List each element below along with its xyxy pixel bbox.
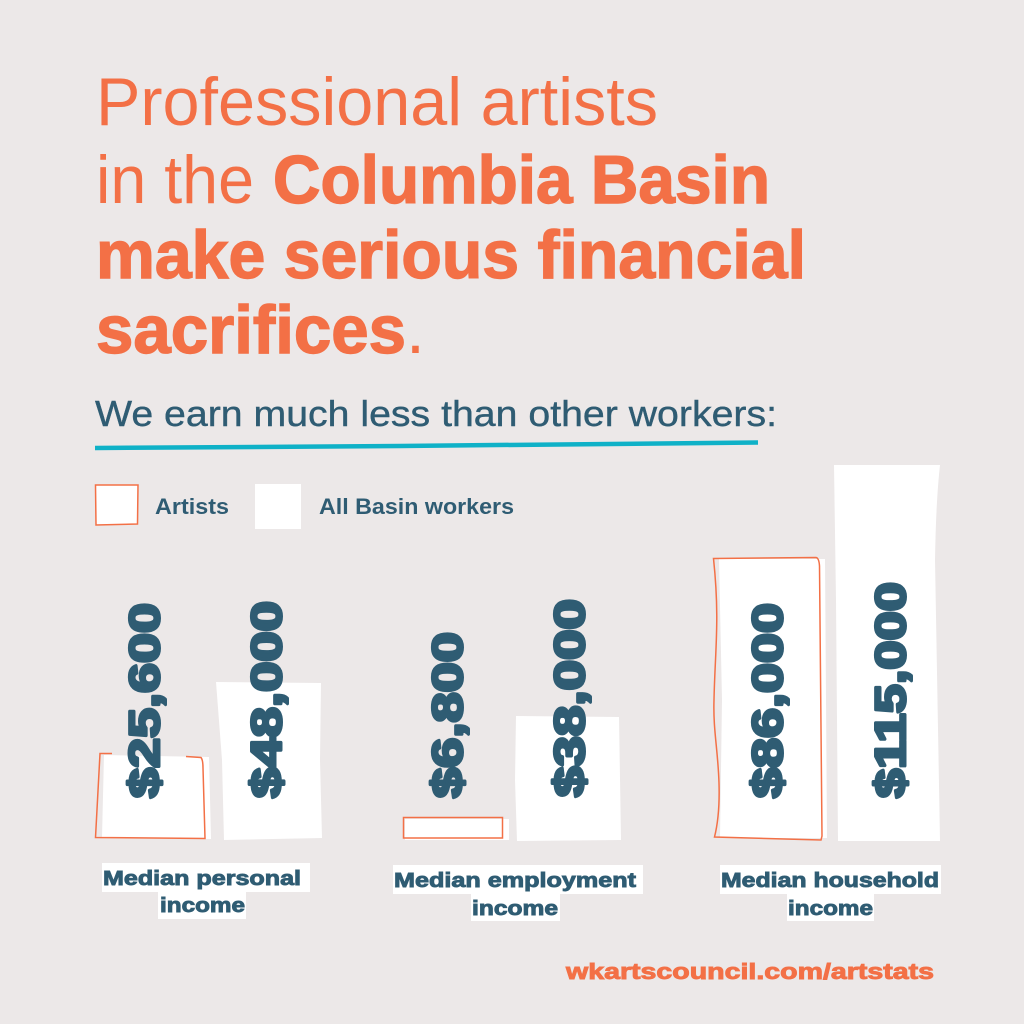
subheading: We earn much less than other workers:	[95, 393, 777, 434]
title: make serious financial	[96, 217, 806, 293]
chart: median personal income	[96, 601, 322, 919]
category label: household	[720, 865, 941, 921]
category label: employment	[393, 865, 643, 921]
category label: household: Median household	[721, 869, 939, 892]
source url: wkartscouncil.com/artstats	[565, 959, 934, 984]
value: artists household income: $86,000	[744, 603, 792, 798]
legend: all workers label: All Basin workers	[319, 494, 514, 519]
subheading underline	[95, 442, 758, 448]
legend: all workers swatch	[255, 484, 301, 529]
category label: personal	[102, 863, 310, 919]
bar: all workers personal income	[216, 682, 322, 840]
category label: employment: income	[472, 897, 558, 920]
category label: household: income	[788, 897, 873, 920]
bar: all workers household income	[834, 465, 940, 841]
bar: artists personal income	[96, 754, 211, 839]
chart: median employment income	[393, 599, 643, 921]
title: Columbia Basin	[273, 142, 770, 218]
bar: all workers employment income	[515, 716, 621, 841]
bar: artists employment income	[404, 818, 509, 840]
bar: artists household income	[714, 558, 827, 840]
value: all workers personal income: $48,000	[243, 601, 291, 798]
value: artists employment income: $6,800	[424, 632, 472, 798]
title: sacrifices	[96, 292, 406, 368]
category label: personal: Median personal	[103, 867, 301, 890]
legend: artists label: Artists	[155, 494, 229, 519]
title: in the	[96, 142, 254, 218]
title	[96, 64, 806, 368]
category label: personal: income	[160, 894, 245, 917]
chart: median household income	[714, 465, 941, 921]
title: .	[406, 292, 425, 368]
title: Professional artists	[96, 64, 658, 140]
value: all workers household income: $115,000	[867, 582, 915, 798]
legend	[96, 484, 514, 529]
value: artists personal income: $25,600	[121, 603, 169, 798]
legend: artists swatch	[96, 485, 138, 525]
value: all workers employment income: $38,000	[546, 599, 594, 797]
category label: employment: Median employment	[394, 869, 636, 892]
